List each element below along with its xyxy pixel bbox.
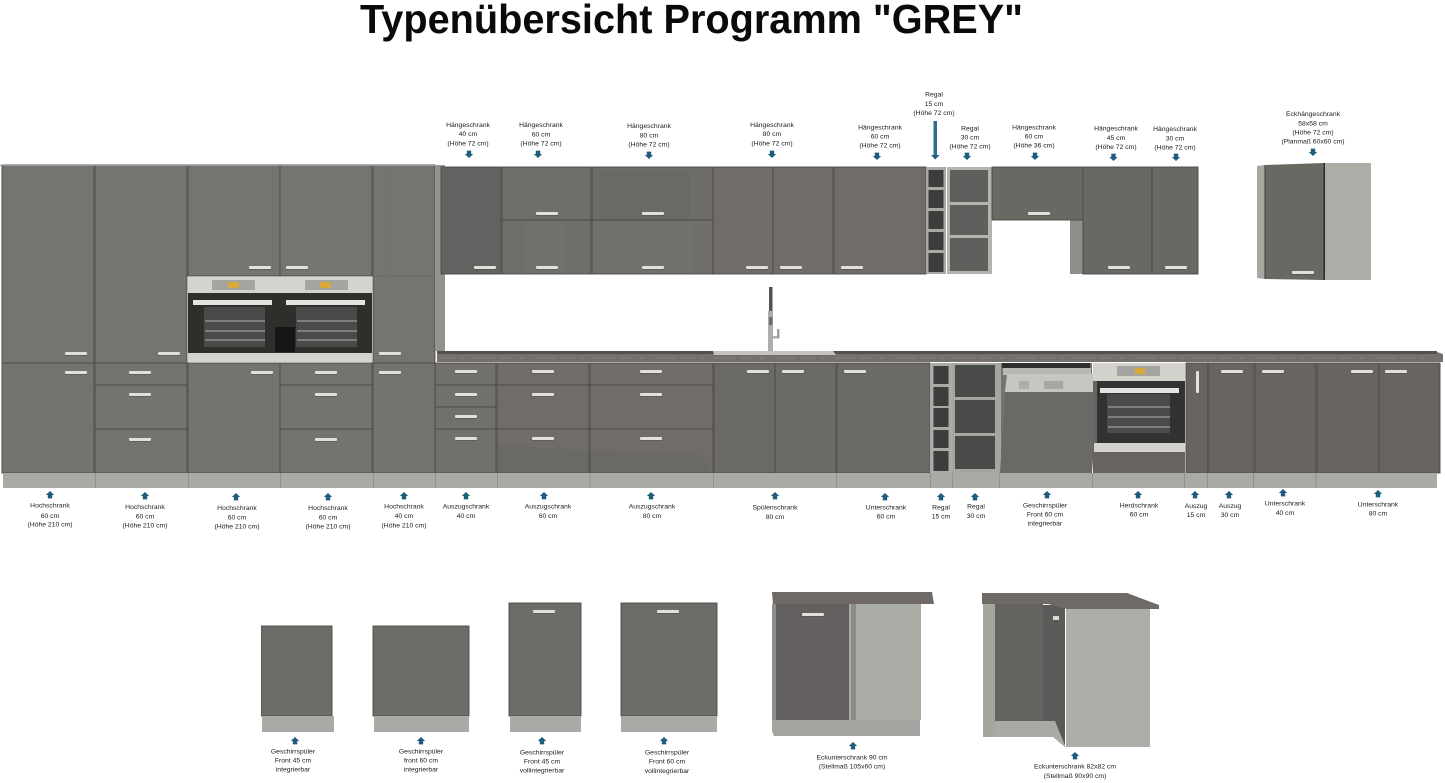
label: Geschirrspüler Front 60 cm vollintegrierbar: vollintegrierbar (645, 768, 690, 775)
label: Hängeschrank 30 cm (1153, 126, 1198, 161)
label: Auszug 15 cm (1185, 491, 1208, 519)
label: Regal 30 cm wall: 30 cm (961, 134, 980, 142)
dishwasher front 60 integrated (373, 626, 469, 732)
label: Geschirrspüler Front 45 cm vollintegrierbar (520, 737, 565, 774)
label: Auszugschrank 80 cm (629, 492, 676, 520)
label: Geschirrspüler Front 45 cm vollintegrierbar: vollintegrierbar (520, 768, 565, 774)
label: Hochschrank 40 cm: (Höhe 210 cm) (382, 522, 426, 530)
panel: corner wall cabinet (1257, 163, 1371, 280)
label: Geschirrspüler Front 60 cm vollintegrierbar (645, 737, 690, 775)
label: Auszugschrank 80 cm: 80 cm (643, 513, 662, 520)
label: Hängeschrank 45 cm: 45 cm (1107, 135, 1126, 142)
label: Regal 15 cm wall with long arrow: (Höhe 72 cm) (913, 110, 955, 117)
label: Hochschrank 40 cm: 40 cm (395, 513, 414, 520)
plinth (3, 473, 1437, 488)
label: Hängeschrank 60 cm second: 60 cm (871, 134, 890, 140)
label: Eckunterschrank 90 cm: (Stellmaß 105x60 cm) (819, 764, 885, 770)
label: Hängeschrank 45 cm: Hängeschrank (1094, 126, 1139, 132)
label: Spülenschrank 80 cm (753, 492, 798, 521)
label: Auszugschrank 40 cm: Auszugschrank (443, 504, 490, 510)
label: Regal 30 cm wall: (Höhe 72 cm) (949, 144, 991, 150)
label: Unterschrank 40 cm: 40 cm (1276, 510, 1295, 517)
label: Auszugschrank 60 cm: Auszugschrank (525, 504, 572, 510)
label: Spülenschrank 80 cm: Spülenschrank (753, 504, 798, 512)
label: Hochschrank 60 cm 4: Hochschrank (308, 505, 348, 512)
dishwasher front 60 fully integrated (621, 603, 717, 732)
label: Hochschrank 60 cm 2: Hochschrank (125, 504, 165, 511)
label: Hochschrank 60 cm 2: 60 cm (136, 514, 155, 520)
label: Unterschrank 40 cm: Unterschrank (1265, 500, 1306, 508)
label: Hängeschrank 60 cm: 60 cm (532, 132, 551, 138)
label: Regal 15 cm wall with long arrow: Regal (925, 92, 943, 98)
icon: built-in oven left (188, 277, 280, 362)
dishwasher front 45 fully integrated (509, 603, 581, 732)
label: Eckhängeschrank (1281, 111, 1345, 156)
label: Unterschrank 80 cm (1358, 490, 1399, 518)
base cabinets right (1186, 363, 1440, 473)
label: Hängeschrank 60 cm height 36 (1012, 124, 1057, 160)
open shelf 15 cm wall (926, 167, 946, 274)
label: Hängeschrank 60 cm second: (Höhe 72 cm) (859, 142, 901, 150)
dishwasher front 45 integrated (261, 626, 334, 732)
label: Auszug 15 cm: 15 cm (1187, 512, 1206, 519)
label: Hängeschrank 30 cm: 30 cm (1166, 136, 1185, 142)
label: Auszugschrank 40 cm: 40 cm (457, 513, 476, 520)
label: Hochschrank 60 cm 3: (Höhe 210 cm) (215, 524, 259, 530)
wall cabinets (441, 167, 926, 274)
label: Hängeschrank 60 cm second (858, 124, 903, 160)
label: Regal 30 cm: Regal (967, 504, 985, 510)
label: Hängeschrank 60 cm height 36: Hängeschrank (1012, 124, 1057, 132)
label: Hängeschrank 80 cm second: (Höhe 72 cm) (751, 140, 793, 148)
label: Geschirrspüler Front 60 cm (1023, 491, 1068, 528)
label: Hochschrank 60 cm 2 (123, 492, 167, 530)
label: Unterschrank 40 cm (1265, 489, 1306, 517)
icon: built-in oven right (275, 277, 372, 362)
label: Eckhängeschrank: (Planmaß 60x60 cm) (1281, 138, 1345, 146)
label: Regal 15 cm (932, 493, 951, 520)
label: Regal 30 cm wall: Regal (961, 126, 979, 132)
label: Hängeschrank 45 cm (1094, 126, 1139, 161)
label: Geschirrspüler Front 60 cm: integrierbar (1028, 520, 1063, 528)
label: Geschirrspüler Front 45 cm integrierbar (271, 737, 316, 774)
label: Unterschrank 60 cm: Unterschrank (866, 504, 907, 512)
label: Spülenschrank 80 cm: 80 cm (766, 514, 785, 521)
label: Hängeschrank 80 cm: 80 cm (640, 132, 659, 140)
label: Geschirrspüler Front 45 cm vollintegrierbar: Front 45 cm (524, 758, 560, 766)
label: Hängeschrank 60 cm second: Hängeschrank (858, 124, 903, 132)
label: Geschirrspüler Front 45 cm integrierbar: integrierbar (276, 766, 311, 774)
wall cabinets right (992, 167, 1198, 274)
label: Geschirrspüler Front 60 cm: Front 60 cm (1027, 512, 1063, 518)
label: Regal 15 cm: Regal (932, 504, 950, 512)
label: Auszugschrank 60 cm (525, 492, 572, 520)
label: Hochschrank 40 cm: Hochschrank (384, 504, 424, 510)
label: Eckunterschrank 82x82 cm (1034, 752, 1116, 780)
panel: main kitchen elevation (0, 163, 1443, 488)
label: Hochschrank 60 cm 4: (Höhe 210 cm) (306, 524, 350, 530)
corner base cabinet 90 (772, 592, 934, 736)
label: Eckhängeschrank: (Höhe 72 cm) (1292, 130, 1334, 136)
label: Hochschrank 60 cm 1: (Höhe 210 cm) (28, 522, 72, 528)
label: Regal 15 cm wall with long arrow: 15 cm (925, 101, 944, 108)
label: Hängeschrank 80 cm (627, 123, 672, 159)
label: Geschirrspüler front 60 cm integrierbar: integrierbar (404, 766, 439, 774)
label: Geschirrspüler Front 60 cm vollintegrierbar: Front 60 cm (649, 758, 685, 766)
label: Auszug 30 cm: 30 cm (1221, 512, 1240, 519)
label: Geschirrspüler Front 45 cm integrierbar: Geschirrspüler (271, 748, 316, 756)
label: Geschirrspüler Front 45 cm integrierbar: Front 45 cm (275, 758, 311, 764)
label: Eckunterschrank 90 cm: Eckunterschrank 90 cm (816, 754, 888, 762)
label: Geschirrspüler Front 60 cm: Geschirrspüler (1023, 502, 1068, 510)
label: Hängeschrank 40 cm: Hängeschrank (446, 122, 491, 129)
label: Unterschrank 60 cm: 60 cm (877, 514, 896, 520)
label: Hängeschrank 60 cm (519, 122, 564, 158)
label: Hängeschrank 40 cm: 40 cm (459, 131, 478, 138)
label: Eckhängeschrank: Eckhängeschrank (1286, 111, 1341, 118)
base cabinets (435, 363, 930, 473)
label: Unterschrank 60 cm (866, 493, 907, 520)
label: Auszug 30 cm (1219, 491, 1242, 519)
label: Auszug 15 cm: Auszug (1185, 503, 1208, 510)
label: Hochschrank 60 cm 3: Hochschrank (217, 505, 257, 512)
open shelf 15 cm base (931, 363, 952, 473)
label: Unterschrank 80 cm: 80 cm (1369, 510, 1388, 518)
label: Geschirrspüler Front 60 cm vollintegrierbar: Geschirrspüler (645, 750, 690, 756)
label: Hängeschrank 30 cm: (Höhe 72 cm) (1154, 144, 1196, 152)
label: Regal 15 cm: 15 cm (932, 514, 951, 520)
label: Regal 30 cm (967, 493, 986, 520)
label: Auszug 30 cm: Auszug (1219, 503, 1242, 510)
label: Hängeschrank 40 cm (446, 122, 491, 158)
label: Geschirrspüler front 60 cm integrierbar (399, 737, 444, 774)
label: Hochschrank 60 cm 1: 60 cm (41, 513, 60, 520)
label: Unterschrank 80 cm: Unterschrank (1358, 502, 1399, 508)
label: Eckunterschrank 82x82 cm: Eckunterschrank 82x82 cm (1034, 764, 1116, 770)
label: Hängeschrank 80 cm: (Höhe 72 cm) (628, 142, 670, 148)
label: Hochschrank 60 cm 2: (Höhe 210 cm) (123, 522, 167, 530)
icon: built-in oven base (1093, 363, 1185, 473)
label: Hängeschrank 45 cm: (Höhe 72 cm) (1095, 144, 1137, 151)
label: Herdschrank 60 cm (1120, 491, 1159, 518)
label: Hängeschrank 60 cm height 36: 60 cm (1025, 134, 1044, 140)
label: Hochschrank 60 cm 4: 60 cm (319, 514, 338, 522)
label: Hochschrank 60 cm 1: Hochschrank (30, 502, 70, 510)
label: Regal 30 cm wall (949, 126, 991, 160)
label: Regal 30 cm: 30 cm (967, 513, 986, 520)
open shelf 30 cm base (952, 363, 1001, 473)
label: Hängeschrank 60 cm: Hängeschrank (519, 122, 564, 129)
worktop (437, 351, 1443, 362)
label: Hängeschrank 80 cm second: Hängeschrank (750, 122, 795, 129)
label: Regal 15 cm wall with long arrow (913, 92, 955, 160)
icon: sink tap (768, 287, 780, 351)
label: Hochschrank 40 cm (382, 492, 426, 530)
label: Herdschrank 60 cm: 60 cm (1130, 512, 1149, 518)
label: Hängeschrank 60 cm height 36: (Höhe 36 cm) (1013, 142, 1055, 150)
label: Hochschrank 60 cm 3: 60 cm (228, 514, 247, 522)
label: Auszugschrank 60 cm: 60 cm (539, 513, 558, 520)
label: Hochschrank 60 cm 4 (306, 493, 350, 530)
open shelf 30 cm wall (947, 167, 992, 274)
label: Hängeschrank 80 cm second: 80 cm (763, 131, 782, 138)
label: Hochschrank 60 cm 1 (28, 491, 72, 528)
label: Hängeschrank 80 cm: Hängeschrank (627, 123, 672, 130)
label: Herdschrank 60 cm: Herdschrank (1120, 502, 1159, 510)
label: Geschirrspüler Front 45 cm vollintegrierbar: Geschirrspüler (520, 750, 565, 756)
label: Hochschrank 60 cm 3 (215, 493, 259, 530)
label: Hängeschrank 30 cm: Hängeschrank (1153, 126, 1198, 133)
label: Eckunterschrank 90 cm (816, 742, 888, 770)
label: Hängeschrank 60 cm: (Höhe 72 cm) (520, 140, 562, 148)
corner base cabinet 82x82 (982, 593, 1159, 748)
label: Eckunterschrank 82x82 cm: (Stellmaß 90x90 cm) (1044, 773, 1106, 780)
label: Hängeschrank 40 cm: (Höhe 72 cm) (447, 140, 489, 148)
label: Hängeschrank 80 cm second (750, 122, 795, 158)
tall cabinets (0, 165, 445, 473)
label: Eckhängeschrank: 58x58 cm (1298, 120, 1328, 128)
panel: separate front panels (261, 592, 1159, 748)
label: Geschirrspüler front 60 cm integrierbar: front 60 cm (404, 758, 438, 764)
label: Auszugschrank 40 cm (443, 492, 490, 520)
label: Geschirrspüler front 60 cm integrierbar: Geschirrspüler (399, 748, 444, 756)
label: Auszugschrank 80 cm: Auszugschrank (629, 504, 676, 510)
dishwasher with open door (1000, 363, 1102, 473)
